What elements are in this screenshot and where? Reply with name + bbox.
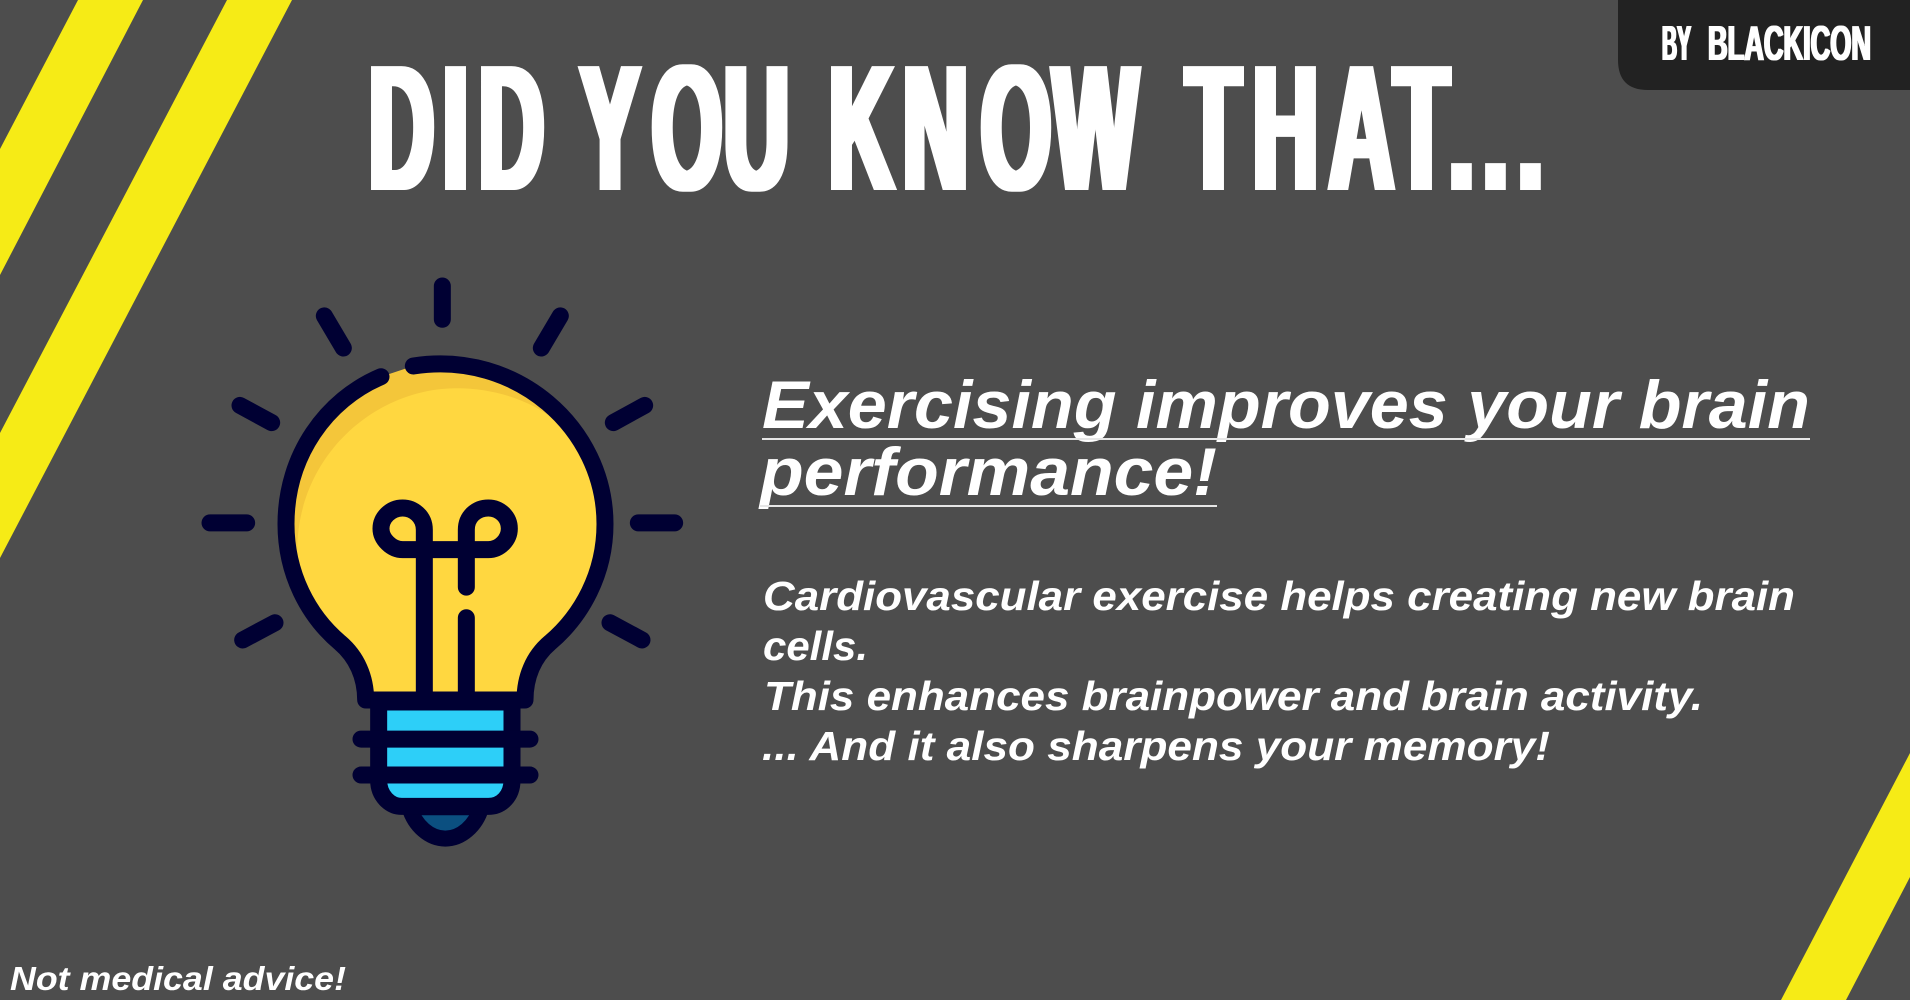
screw base [379,702,512,806]
filament [381,508,509,700]
title: DID YOU KNOW THAT... [369,28,1543,229]
stripe: top left outer [0,0,143,275]
body text [762,573,1795,769]
badge: by Blackicon [1618,0,1910,90]
stripe: bottom right [1781,753,1910,1000]
icon: light bulb [210,286,675,839]
body text: ... And it also sharpens your memory! [762,723,1550,769]
disclaimer: Not medical advice! [10,960,346,997]
rays [210,286,675,640]
heading: Exercising improves your brain [762,367,1810,443]
body text: Cardiovascular exercise helps creating new brain [763,573,1795,619]
base threads [361,739,530,775]
heading [758,367,1810,510]
stripe: top left inner [0,0,292,558]
badge: by Blackicon: BY [1662,17,1691,71]
heading: performance! [758,434,1217,510]
body text: cells. [763,623,868,669]
bulb cap [409,807,481,839]
bulb glass [294,368,596,692]
bulb outline [286,364,605,700]
body text: This enhances brainpower and brain activity. [764,673,1703,719]
